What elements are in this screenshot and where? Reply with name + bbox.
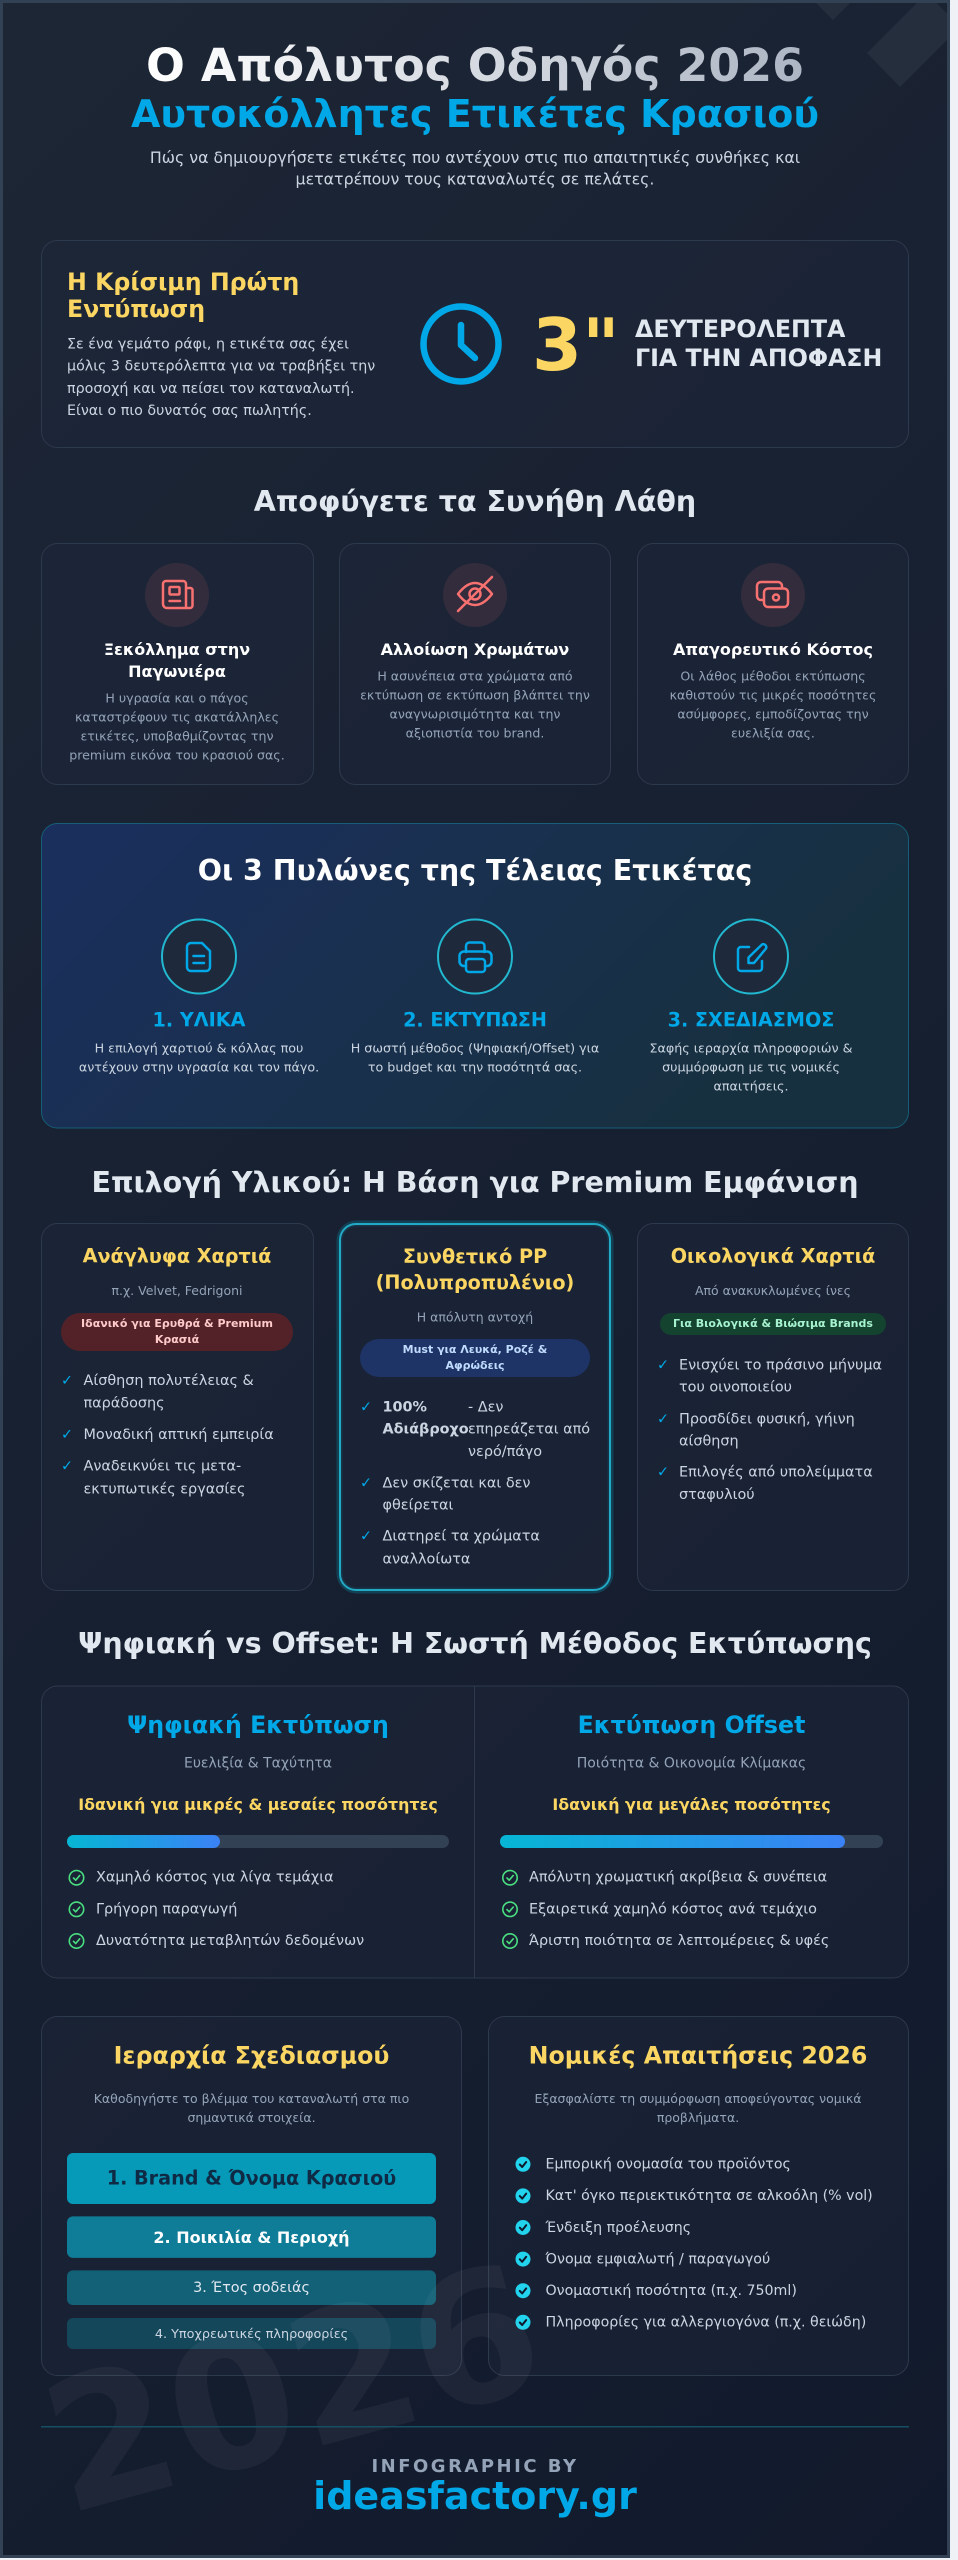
pillar text — [351, 1041, 599, 1075]
panel: critical first impression — [42, 240, 908, 448]
feature list: ✓ — [61, 1373, 73, 1389]
bar: 90 percent — [500, 1835, 883, 1848]
hierarchy level 1: 1. Brand & Όνομα Κρασιού — [107, 2167, 396, 2190]
feature list — [61, 1373, 274, 1497]
pill: white wines — [360, 1339, 590, 1377]
feature list: Ενισχύει το πράσινο μήνυμα — [679, 1357, 882, 1373]
checklist: Ένδειξη προέλευσης — [544, 2220, 691, 2236]
pillar 2: printing — [351, 920, 599, 1075]
column: offset printing — [500, 1711, 883, 1949]
pillar text: αντέχουν στην υγρασία και τον πάγο. — [79, 1060, 319, 1075]
icon: printer — [438, 920, 512, 994]
panel: digital vs offset comparison — [42, 1686, 908, 1978]
footer rule — [41, 2426, 909, 2428]
feature list: ✓ — [657, 1357, 669, 1373]
ideal use: Ιδανική για μικρές & μεσαίες ποσότητες — [78, 1795, 438, 1814]
pillar text: Η επιλογή χαρτιού & κόλλας που — [95, 1041, 303, 1056]
3 seconds number: 3" — [532, 303, 620, 387]
card title — [376, 1245, 574, 1294]
card text: αξιοπιστία του brand. — [406, 726, 544, 741]
card title: Συνθετικό PP — [403, 1245, 547, 1268]
pillar text: Σαφής ιεραρχία πληροφοριών & — [649, 1041, 853, 1056]
feature list: Επιλογές από υπολείμματα — [679, 1465, 873, 1481]
card title: Ξεκόλλημα στην — [104, 640, 250, 659]
pillar text: συμμόρφωση με τις νομικές — [662, 1060, 840, 1075]
panel: prohibitive cost — [638, 544, 908, 784]
card title: Απαγορευτικό Κόστος — [673, 640, 873, 659]
card text — [670, 669, 876, 741]
feature list: Εξαιρετικά χαμηλό κόστος ανά τεμάχιο — [529, 1901, 817, 1917]
card text: Η υγρασία και ο πάγος — [105, 691, 249, 706]
feature list — [360, 1400, 590, 1567]
panel: legal requirements — [488, 2016, 908, 2376]
feature list — [69, 1870, 364, 1949]
pillars heading: Οι 3 Πυλώνες της Τέλειας Ετικέτας — [198, 854, 752, 887]
feature list: Αδιάβροχο — [382, 1422, 469, 1438]
bar: 40 percent — [67, 1835, 449, 1848]
feature list: ✓ — [360, 1475, 372, 1491]
column subtitle: Ευελιξία & Ταχύτητα — [184, 1755, 332, 1771]
card text: Η ασυνέπεια στα χρώματα από — [377, 669, 573, 684]
seconds label — [635, 315, 882, 372]
hierarchy level 4 — [67, 2318, 436, 2349]
hero heading — [67, 268, 299, 323]
feature list — [503, 1870, 829, 1949]
pillar 3: design — [649, 920, 853, 1094]
seconds label: ΓΙΑ ΤΗΝ ΑΠΟΦΑΣΗ — [635, 344, 882, 372]
column title: Ψηφιακή Εκτύπωση — [127, 1711, 389, 1739]
feature list: αναλλοίωτα — [382, 1551, 470, 1567]
heading: common mistakes: Αποφύγετε τα Συνήθη Λάθη — [254, 485, 696, 518]
watermark: 2026: 2026 — [24, 2224, 562, 2556]
pill: organic brands: Για Βιολογικά & Βιώσιμα Brands — [673, 1317, 873, 1330]
intro text — [150, 148, 800, 188]
column title: Εκτύπωση Offset — [578, 1711, 805, 1739]
feature list: Χαμηλό κόστος για λίγα τεμάχια — [96, 1870, 334, 1886]
feature list: ✓ — [61, 1427, 73, 1443]
footer brand: ideasfactory.gr — [313, 2474, 637, 2518]
pill: red wines: Ιδανικό για Ερυθρά & Premium — [81, 1317, 273, 1330]
pillar text: Η σωστή μέθοδος (Ψηφιακή/Offset) για — [351, 1041, 599, 1056]
feature list: Διατηρεί τα χρώματα — [382, 1529, 540, 1545]
feature list: Αναδεικνύει τις μετα- — [84, 1459, 241, 1475]
hierarchy level 2: 2. Ποικιλία & Περιοχή — [153, 2228, 350, 2247]
checklist — [516, 2157, 873, 2331]
checklist: Κατ' όγκο περιεκτικότητα σε αλκοόλη (% vol) — [546, 2188, 873, 2204]
icon: clock — [424, 306, 498, 382]
card text: εκτύπωση σε εκτύπωση βλάπτει την — [360, 688, 590, 703]
card title — [104, 640, 250, 681]
feature list: Μοναδική απτική εμπειρία — [84, 1427, 274, 1443]
column subtitle: Ποιότητα & Οικονομία Κλίμακας — [577, 1755, 806, 1771]
heading: material choice: Επιλογή Υλικού: Η Βάση για Premium Εμφάνιση — [92, 1166, 858, 1199]
icon: document — [162, 920, 236, 994]
card text: ασύμφορες, εμποδίζοντας την — [677, 707, 869, 722]
feature list: Δυνατότητα μεταβλητών δεδομένων — [96, 1933, 364, 1949]
card title: Αλλοίωση Χρωμάτων — [381, 640, 569, 659]
hero text — [67, 336, 375, 419]
column: digital printing — [67, 1711, 449, 1949]
feature list: αίσθηση — [679, 1434, 739, 1450]
intro text: μετατρέπουν τους καταναλωτές σε πελάτες. — [296, 170, 654, 188]
card subtitle: π.χ. Velvet, Fedrigoni — [111, 1283, 243, 1298]
card subtitle: Η απόλυτη αντοχή — [417, 1310, 533, 1325]
pill: red wines — [61, 1313, 293, 1351]
panel: peeling in the fridge — [42, 544, 314, 784]
feature list: εκτυπωτικές εργασίες — [84, 1481, 245, 1497]
hierarchy level 1 — [67, 2153, 436, 2204]
panel text: Καθοδηγήστε το βλέμμα του καταναλωτή στα πιο — [94, 2091, 409, 2106]
feature list: Αίσθηση πολυτέλειας & — [84, 1373, 254, 1389]
decorative diamonds top right — [813, 0, 958, 87]
hierarchy level 4: 4. Υποχρεωτικές πληροφορίες — [155, 2327, 348, 2342]
checklist: Εμπορική ονομασία του προϊόντος — [546, 2157, 791, 2173]
feature list: φθείρεται — [382, 1498, 454, 1514]
panel: three pillars — [42, 824, 908, 1128]
pill: white wines: Must για Λευκά, Ροζέ & — [403, 1343, 548, 1356]
ideal use: Ιδανική για μεγάλες ποσότητες — [552, 1795, 831, 1814]
checklist: Όνομα εμφιαλωτή / παραγωγού — [544, 2251, 770, 2267]
seconds label: ΔΕΥΤΕΡΟΛΕΠΤΑ — [635, 315, 846, 343]
panel: design hierarchy — [42, 2016, 462, 2376]
card text — [360, 669, 590, 741]
pillar title: 1. ΥΛΙΚΑ — [153, 1009, 246, 1032]
card text: ευελιξία σας. — [731, 726, 815, 741]
feature list: ✓ — [657, 1411, 669, 1427]
panel: colour distortion — [340, 544, 610, 784]
card title: (Πολυπροπυλένιο) — [376, 1271, 574, 1294]
feature list: επηρεάζεται από — [468, 1422, 590, 1438]
hero text: Σε ένα γεμάτο ράφι, η ετικέτα σας έχει — [67, 336, 349, 352]
hierarchy level 3: 3. Έτος σοδειάς — [193, 2280, 310, 2296]
feature list: Άριστη ποιότητα σε λεπτομέρειες & υφές — [529, 1933, 829, 1949]
heading: digital vs offset: Ψηφιακή vs Offset: Η Σωστή Μέθοδος Εκτύπωσης — [78, 1627, 872, 1660]
panel title: Ιεραρχία Σχεδιασμού — [114, 2042, 389, 2070]
icon: edit — [714, 920, 788, 994]
pill: red wines: Κρασιά — [155, 1333, 200, 1346]
card title: Ανάγλυφα Χαρτιά — [83, 1245, 271, 1268]
intro text: Πώς να δημιουργήσετε ετικέτες που αντέχουν στις πιο απαιτητικές συνθήκες και — [150, 148, 800, 167]
card text — [69, 691, 285, 763]
feature list: Δεν σκίζεται και δεν — [382, 1475, 530, 1491]
hierarchy level 2 — [67, 2216, 436, 2258]
panel text: σημαντικά στοιχεία. — [187, 2110, 316, 2125]
card text: καταστρέφουν τις ακατάλληλες — [75, 710, 279, 725]
feature list: ✓ — [360, 1400, 372, 1416]
feature list: του οινοποιείου — [679, 1380, 792, 1396]
panel text — [534, 2091, 862, 2125]
card text: καθιστούν τις μικρές ποσότητες — [670, 688, 876, 703]
pillar text — [79, 1041, 319, 1075]
subtitle: Αυτοκόλλητες Ετικέτες Κρασιού — [131, 92, 819, 136]
card text: αναγνωρισιμότητα και την — [390, 707, 560, 722]
feature list: Γρήγορη παραγωγή — [96, 1901, 237, 1917]
feature list: νερό/πάγο — [468, 1444, 542, 1460]
card text: Οι λάθος μέθοδοι εκτύπωσης — [680, 669, 866, 684]
feature list: - Δεν — [468, 1400, 503, 1416]
pill: white wines: Αφρώδεις — [445, 1359, 505, 1372]
icon: crossed eye — [443, 563, 507, 627]
feature list: σταφυλιού — [679, 1487, 755, 1503]
footer label: INFOGRAPHIC BY — [371, 2456, 579, 2477]
card title: Οικολογικά Χαρτιά — [671, 1245, 875, 1268]
feature list — [657, 1357, 882, 1503]
pillar title: 2. ΕΚΤΥΠΩΣΗ — [403, 1009, 547, 1032]
pillar 1: materials — [79, 920, 319, 1075]
panel text: Εξασφαλίστε τη συμμόρφωση αποφεύγοντας νομικά — [534, 2091, 862, 2106]
panel: synthetic PP highlighted — [340, 1224, 610, 1590]
checklist: Ονομαστική ποσότητα (π.χ. 750ml) — [546, 2283, 797, 2299]
pill: organic brands — [660, 1313, 886, 1335]
feature list: ✓ — [61, 1459, 73, 1475]
hero heading: Η Κρίσιμη Πρώτη — [67, 268, 299, 296]
feature list: 100% — [382, 1400, 427, 1416]
pillar text: απαιτήσεις. — [713, 1079, 789, 1094]
pillar text — [649, 1041, 853, 1094]
title: Ο Απόλυτος Οδηγός 2026 — [146, 38, 804, 92]
panel: eco papers — [638, 1224, 908, 1590]
card text: ετικέτες, υποβαθμίζοντας την — [80, 729, 274, 744]
hero text: προσοχή και να πείσει τον καταναλωτή. — [67, 381, 355, 397]
icon: newspaper label — [145, 563, 209, 627]
panel: embossed papers — [42, 1224, 314, 1590]
panel title: Νομικές Απαιτήσεις 2026 — [529, 2042, 867, 2070]
feature list: ✓ — [360, 1529, 372, 1545]
hero text: Είναι ο πιο δυνατός σας πωλητής. — [67, 403, 312, 419]
hero text: μόλις 3 δευτερόλεπτα για να τραβήξει την — [67, 359, 375, 375]
checklist: Πληροφορίες για αλλεργιογόνα (π.χ. θειώδη) — [546, 2315, 866, 2331]
feature list: Απόλυτη χρωματική ακρίβεια & συνέπεια — [529, 1870, 827, 1886]
pillar title: 3. ΣΧΕΔΙΑΣΜΟΣ — [668, 1009, 834, 1032]
pillar text: το budget και την ποσότητά σας. — [368, 1060, 582, 1075]
card subtitle: Από ανακυκλωμένες ίνες — [695, 1283, 851, 1298]
card text: premium εικόνα του κρασιού σας. — [69, 748, 285, 763]
hierarchy level 3 — [67, 2270, 436, 2305]
hero heading: Εντύπωση — [67, 295, 205, 323]
feature list: παράδοσης — [84, 1395, 165, 1411]
panel text — [94, 2091, 409, 2125]
icon: banknotes — [741, 563, 805, 627]
panel text: προβλήματα. — [657, 2110, 739, 2125]
feature list: Προσδίδει φυσική, γήινη — [679, 1411, 855, 1427]
card title: Παγωνιέρα — [128, 662, 226, 681]
feature list: ✓ — [657, 1465, 669, 1481]
